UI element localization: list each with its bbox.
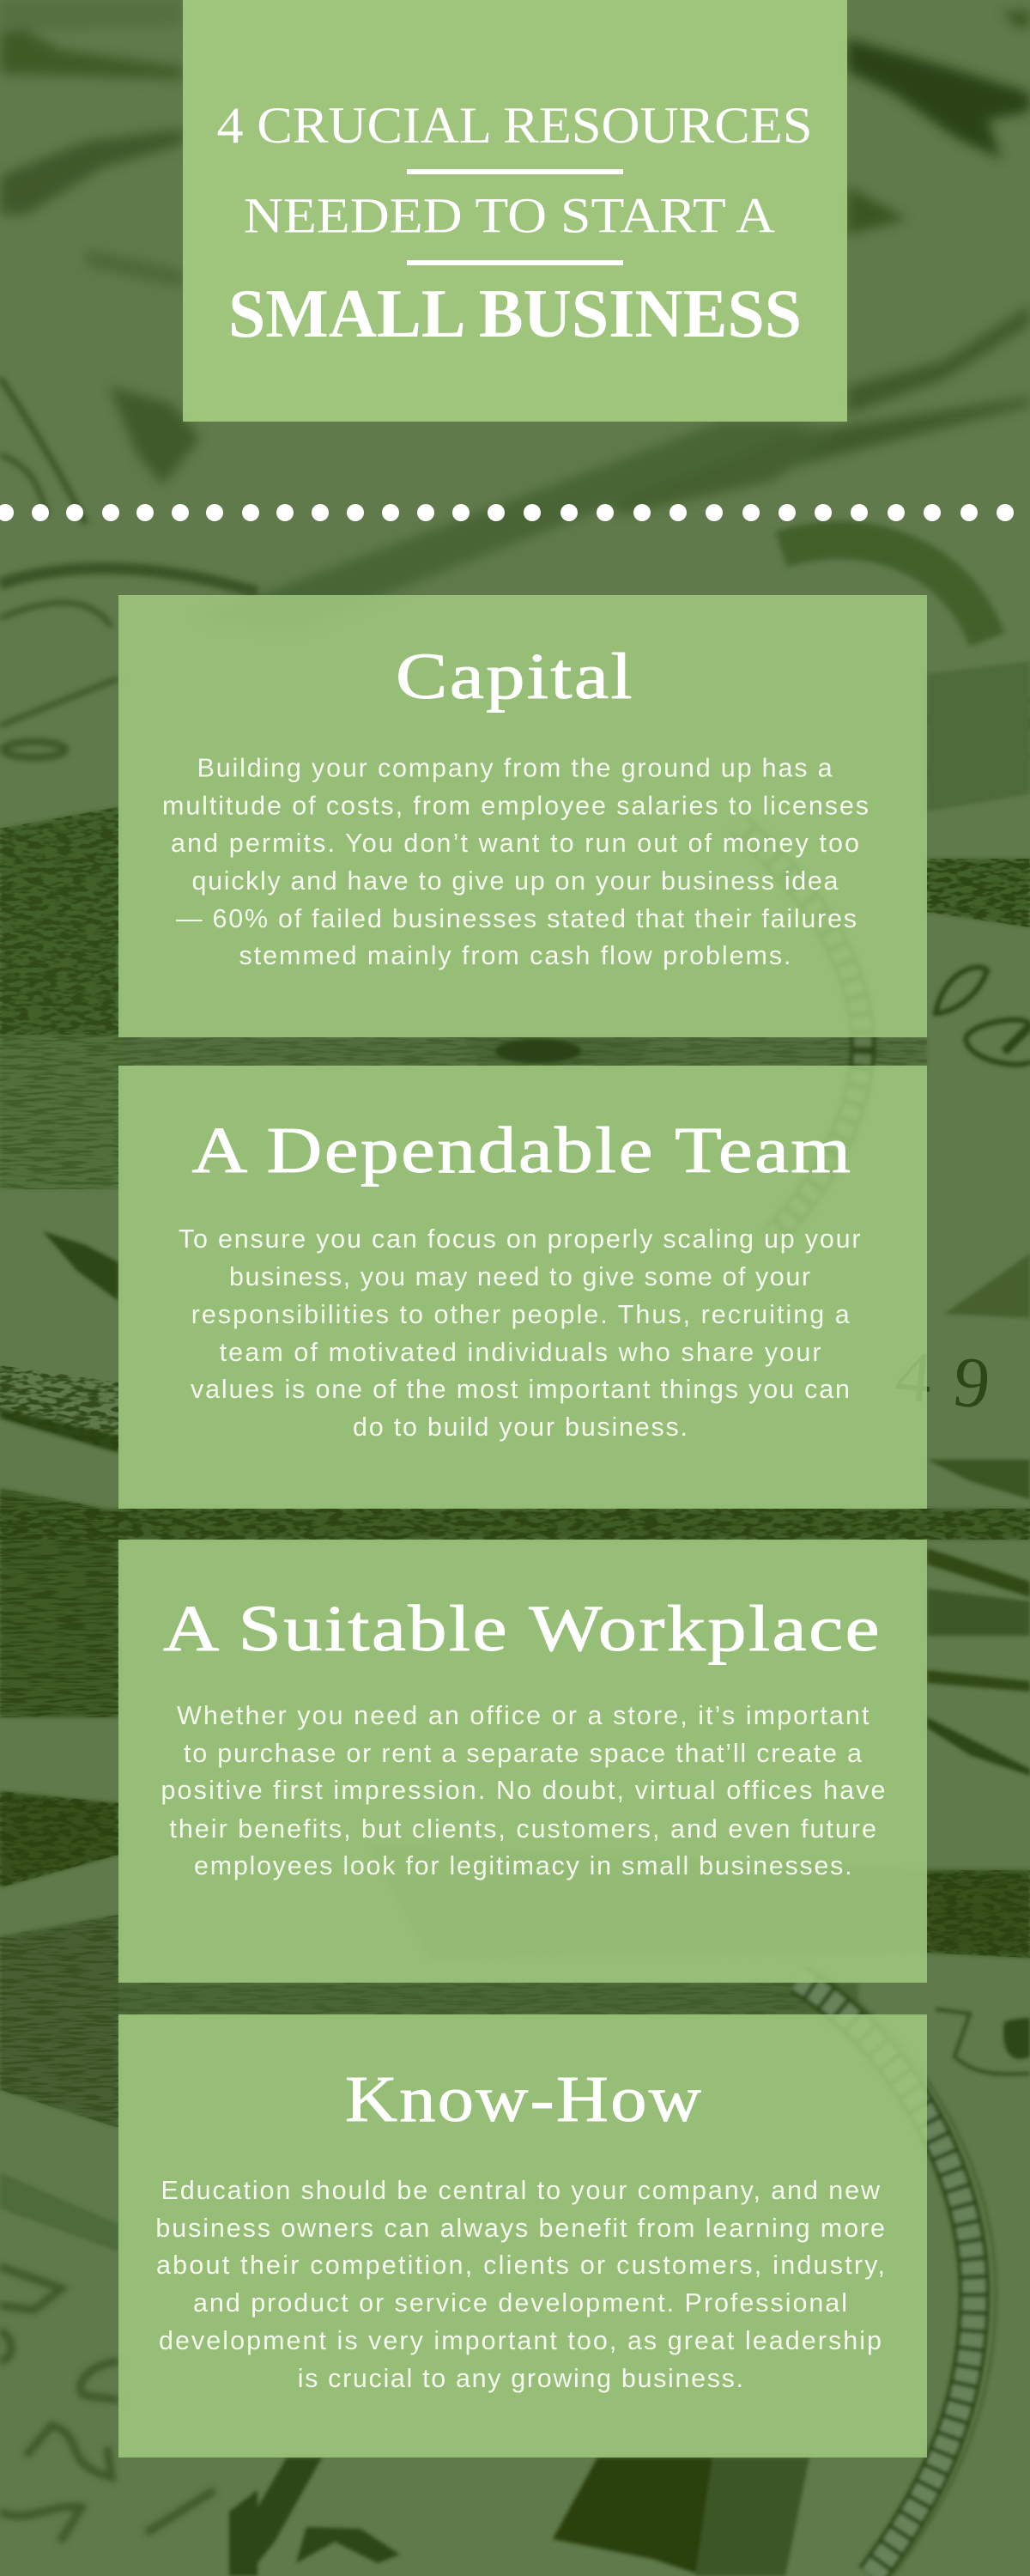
body: capital: — 60% of failed businesses stated that their failures	[176, 904, 857, 933]
panel: capital	[118, 595, 927, 1037]
body: a dependable team	[179, 1224, 860, 1442]
body: a dependable team: business, you may need to give some of your	[229, 1262, 810, 1291]
body: a suitable workplace: to purchase or rent a separate space that’ll create a	[184, 1739, 862, 1768]
body: know-how: development is very important too, as great leadership	[159, 2326, 882, 2355]
body: a dependable team: To ensure you can focus on properly scaling up your	[179, 1224, 860, 1254]
body: a suitable workplace: Whether you need an office or a store, it’s important	[177, 1701, 869, 1730]
body: capital	[162, 754, 869, 970]
dotted divider	[0, 504, 1014, 521]
body: a suitable workplace: employees look for legitimacy in small businesses.	[194, 1851, 852, 1880]
body: a dependable team: values is one of the most important things you can	[191, 1375, 850, 1404]
body: capital: quickly and have to give up on your business idea	[192, 866, 839, 896]
heading: a suitable workplace: A Suitable Workplace	[163, 1593, 882, 1665]
body: a suitable workplace: positive first impression. No doubt, virtual offices have	[161, 1776, 886, 1805]
body: a dependable team: responsibilities to other people. Thus, recruiting a	[191, 1300, 850, 1329]
panel: a dependable team	[118, 1066, 927, 1509]
face and engraved areas	[0, 661, 1030, 2576]
banknote letters, bottom left	[0, 2267, 215, 2542]
body: know-how: is crucial to any growing business.	[298, 2364, 743, 2393]
body: a dependable team: team of motivated individuals who share your	[220, 1338, 821, 1367]
title line 3: SMALL BUSINESS	[228, 276, 802, 352]
heading: know-how: Know-How	[345, 2063, 703, 2136]
heading: a dependable team: A Dependable Team	[192, 1115, 853, 1187]
blurred top bills	[0, 0, 1030, 631]
panel: a suitable workplace	[118, 1540, 927, 1983]
title line 1: 4 CRUCIAL RESOURCES	[216, 97, 812, 154]
body: know-how	[155, 2176, 885, 2393]
body: a suitable workplace: their benefits, but clients, customers, and even future	[169, 1814, 876, 1844]
body: know-how: about their competition, clients or customers, industry,	[156, 2251, 885, 2280]
mottled engraving texture	[0, 807, 1030, 2128]
seal rings	[495, 824, 1030, 2576]
panel: title	[183, 0, 847, 422]
body: know-how: and product or service development. Professional	[193, 2288, 847, 2318]
title line 2: NEEDED TO START A	[244, 187, 775, 244]
panel: know-how	[118, 2014, 927, 2458]
body: capital: and permits. You don’t want to run out of money too	[171, 829, 859, 858]
body: know-how: business owners can always benefit from learning more	[155, 2214, 885, 2243]
body: a dependable team: do to build your business.	[353, 1413, 688, 1442]
body: a suitable workplace	[161, 1701, 886, 1880]
banknote serial digits: 49	[892, 1335, 994, 1425]
heading: capital: Capital	[396, 641, 634, 713]
body: capital: Building your company from the ground up has a	[197, 754, 833, 783]
body: capital: multitude of costs, from employee salaries to licenses	[162, 792, 869, 821]
body: capital: stemmed mainly from cash flow problems.	[239, 941, 791, 970]
body: know-how: Education should be central to your company, and new	[161, 2176, 881, 2205]
